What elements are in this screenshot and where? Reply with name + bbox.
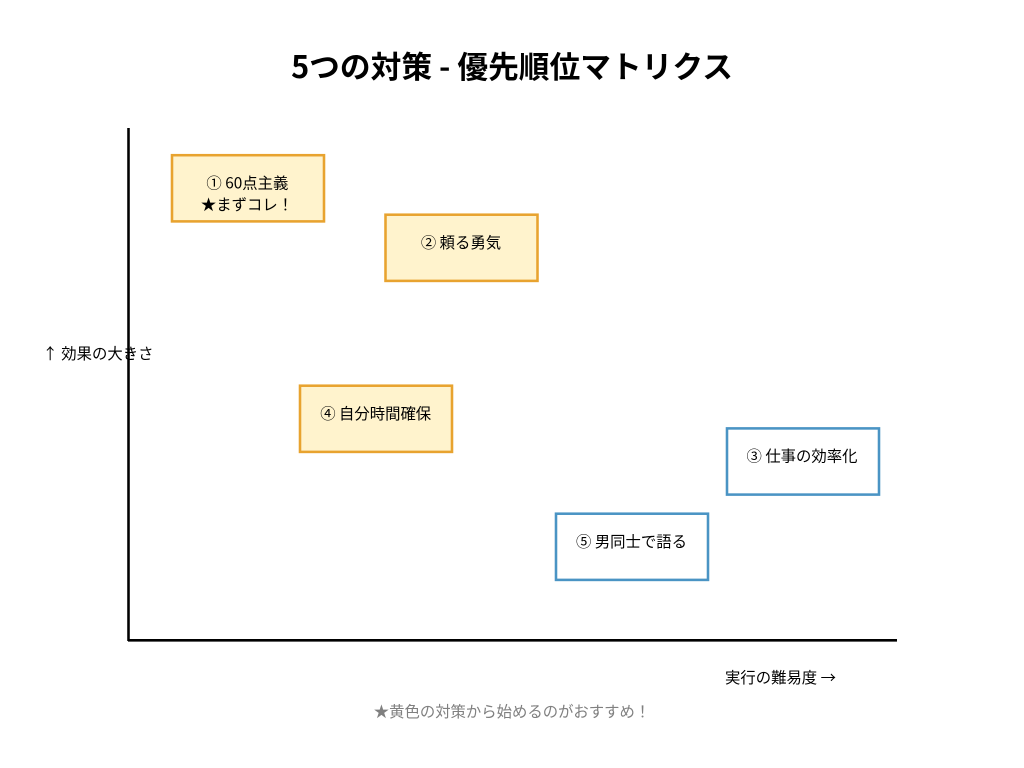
y-axis label: ↑ 効果の大きさ [42,342,153,364]
title: 5つの対策 - 優先順位マトリクス [291,42,733,87]
card: measure 4 [300,386,452,452]
card: measure 1: ★まずコレ！ [201,193,293,215]
footnote: ★黄色の対策から始めるのがおすすめ！ [374,700,650,722]
y axis [127,128,130,641]
x-axis label: 実行の難易度 → [725,666,836,688]
x axis [128,639,897,642]
card: measure 1 [172,155,324,221]
card: measure 2: ② 頼る勇気 [421,231,501,253]
card: measure 5 [556,514,708,580]
card: measure 5: ⑤ 男同士で語る [576,530,687,552]
card: measure 1: ① 60点主義 [206,172,288,194]
card: measure 4: ④ 自分時間確保 [320,402,432,424]
card: measure 3: ③ 仕事の効率化 [747,444,857,466]
card: measure 3 [727,428,879,495]
card: measure 2 [386,215,538,281]
